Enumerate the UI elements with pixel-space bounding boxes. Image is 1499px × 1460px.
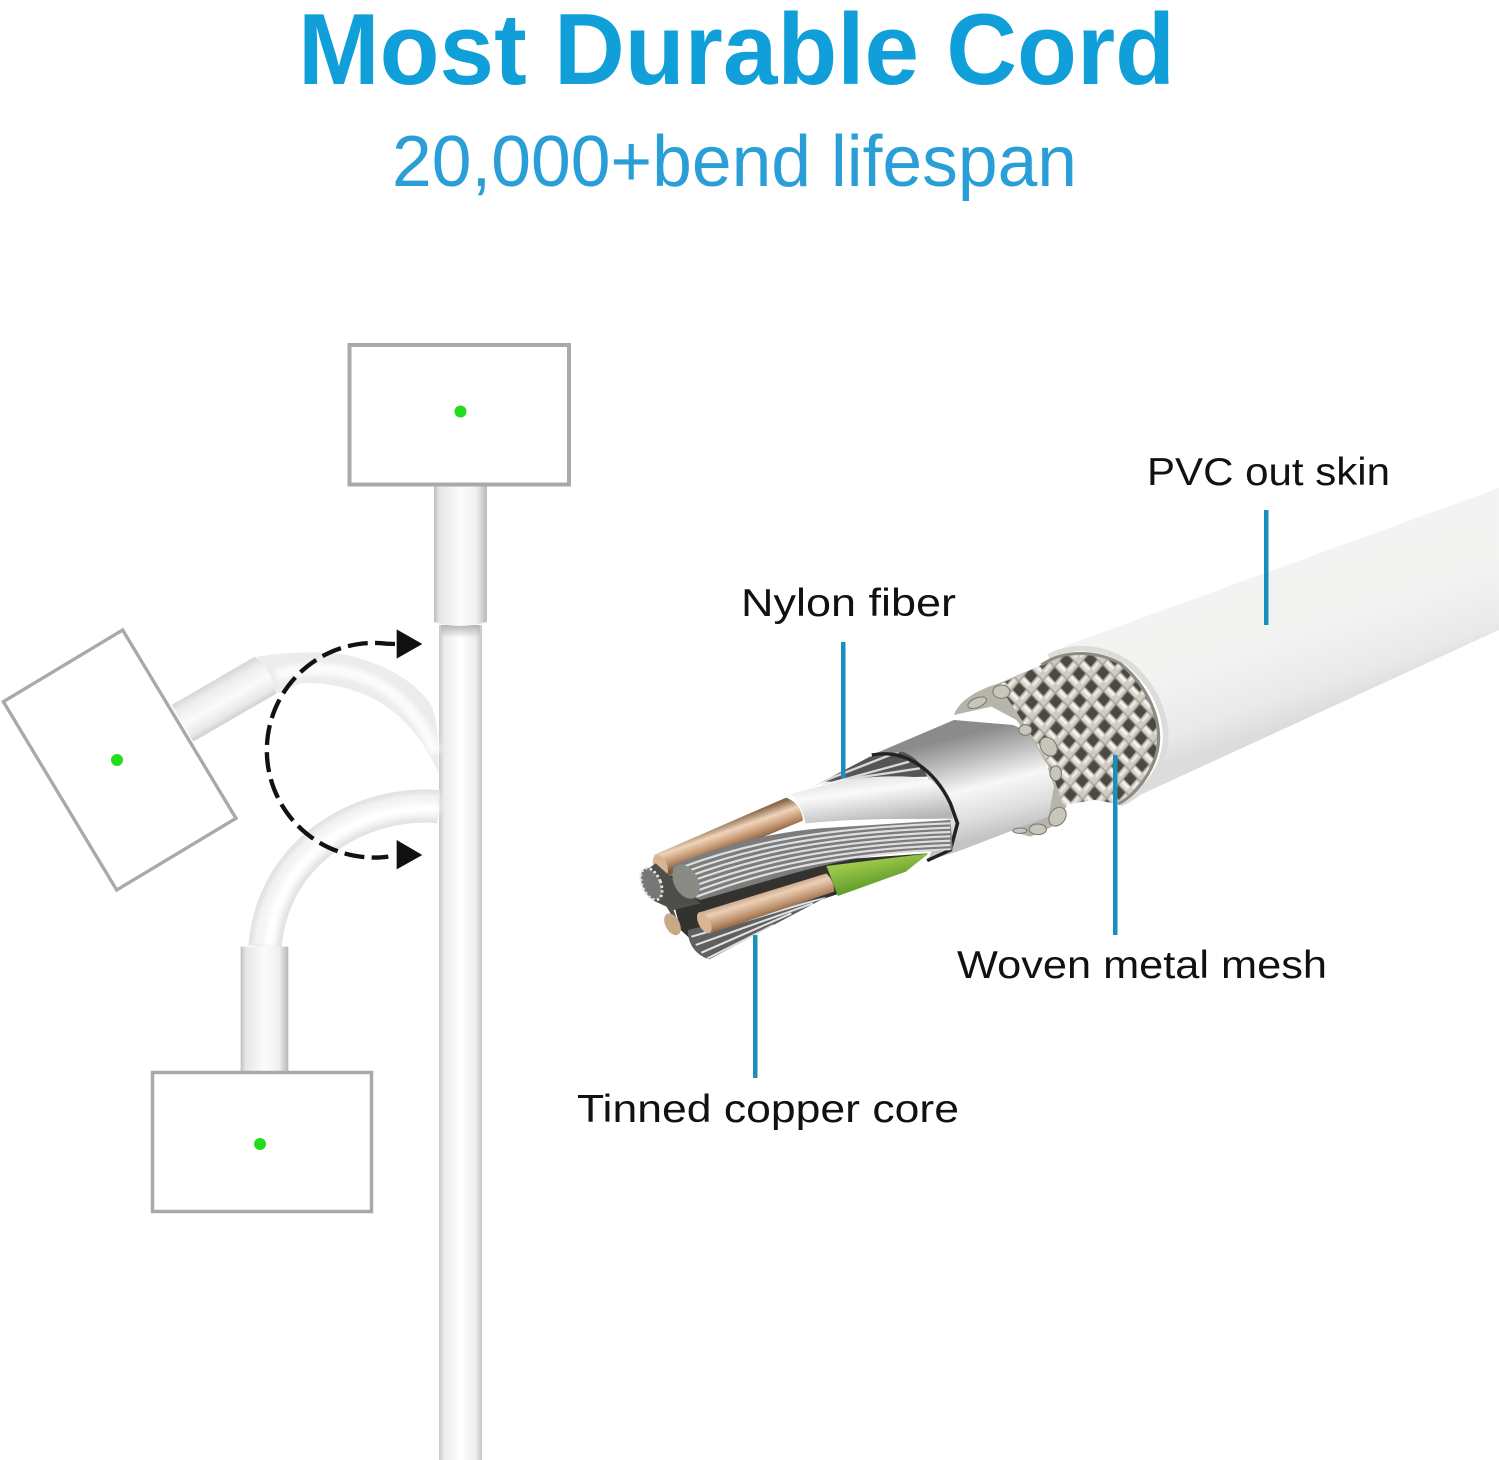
cable cross-section bbox=[637, 488, 1499, 959]
small copper end bbox=[661, 911, 684, 938]
left strand bundle bbox=[637, 863, 700, 930]
label: Woven metal mesh: Woven metal mesh bbox=[957, 944, 1327, 987]
straight cable bbox=[439, 625, 482, 1460]
PVC outer skin bbox=[1063, 488, 1499, 805]
label: Tinned copper core: Tinned copper core bbox=[577, 1088, 959, 1131]
grey tinned strand bundle bbox=[667, 820, 953, 903]
bend illustration bbox=[3, 629, 439, 1072]
leader line: mesh bbox=[1113, 755, 1118, 935]
nylon fiber bundle bbox=[814, 752, 927, 786]
top connector boot bbox=[434, 484, 487, 626]
dark core backing bbox=[666, 850, 927, 957]
leader line: nylon bbox=[841, 642, 846, 778]
upper bent cable bbox=[257, 652, 439, 773]
foil shield bbox=[872, 720, 1054, 861]
subtitle: 20,000+bend lifespan bbox=[392, 122, 1077, 202]
lower strand bundle bbox=[688, 897, 827, 959]
top connector bbox=[350, 345, 569, 484]
lower connector boot bbox=[241, 947, 288, 1072]
label: PVC out skin: PVC out skin bbox=[1147, 451, 1390, 494]
dashed arc arrow bbox=[267, 629, 422, 869]
mesh edge beads bbox=[966, 685, 1070, 835]
rotated connector bbox=[3, 630, 236, 890]
frayed mesh edge bbox=[954, 665, 1066, 837]
rotated connector boot bbox=[172, 657, 277, 742]
lower connector bbox=[152, 1072, 372, 1212]
white insulated wire bbox=[791, 776, 953, 823]
upper copper conductor bbox=[650, 798, 803, 879]
green insulated wire bbox=[826, 853, 929, 896]
woven metal mesh bbox=[999, 655, 1157, 805]
label: Nylon fiber: Nylon fiber bbox=[741, 582, 956, 625]
leader line: copper bbox=[753, 935, 758, 1078]
lower copper conductor bbox=[694, 873, 834, 935]
lower bent cable bbox=[265, 806, 439, 947]
leader line: PVC bbox=[1264, 510, 1268, 625]
